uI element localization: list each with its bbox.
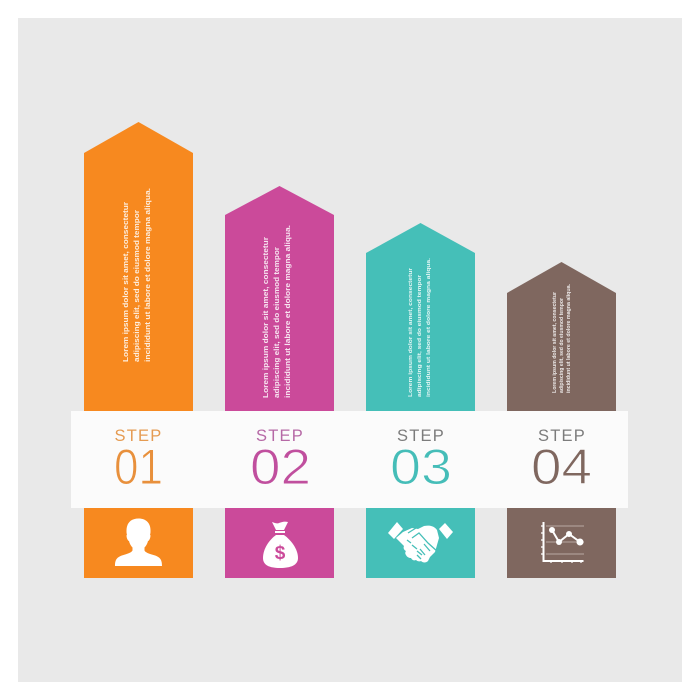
arrow bar: step 3 teal	[366, 223, 475, 578]
text block: step 3 description: incididunt ut labore et dolore magna aliqua.	[426, 258, 432, 397]
label: step 04: 04	[531, 439, 592, 495]
text block: step 1 description: adipiscing elit, sed do eiusmod tempor	[132, 210, 141, 362]
text block: step 3 description: adipiscing elit, sed do eiusmod tempor	[417, 274, 423, 397]
dollar sign: $	[275, 543, 286, 564]
white label band	[71, 411, 628, 508]
label: step 01: 01	[114, 439, 163, 495]
arrow bar: step 4 brown	[507, 262, 616, 578]
label: step 04: STEP	[538, 427, 586, 445]
text block: step 2 description: adipiscing elit, sed do eiusmod tempor	[274, 247, 281, 398]
text block: step 3 description	[408, 258, 432, 397]
icon: handshake	[388, 522, 453, 562]
label: step 02: 02	[250, 439, 311, 495]
text block: step 4 description: adipiscing elit, sed do eiusmod tempor	[559, 298, 565, 393]
text block: step 2 description	[263, 225, 292, 398]
icon: money bag	[263, 522, 298, 568]
text block: step 2 description: incididunt ut labore et dolore magna aliqua.	[285, 225, 292, 398]
text block: step 1 description	[121, 188, 152, 362]
label: step 03: 03	[390, 439, 452, 495]
icon: line chart	[541, 522, 584, 563]
arrow bar: step 1 orange	[84, 122, 193, 578]
text block: step 4 description: incididunt ut labore et dolore magna aliqua.	[566, 283, 572, 393]
text block: step 4 description	[552, 283, 572, 393]
label: step 01: STEP	[115, 427, 162, 445]
label: step 02: STEP	[256, 427, 304, 445]
text block: step 4 description: Lorem ipsum dolor sit amet, consectetur	[552, 292, 558, 393]
arrow bar: step 2 pink	[225, 186, 334, 578]
text block: step 1 description: incididunt ut labore et dolore magna aliqua.	[143, 188, 152, 362]
icon: person	[115, 518, 162, 566]
text block: step 1 description: Lorem ipsum dolor sit amet, consectetur	[121, 202, 130, 362]
text block: step 3 description: Lorem ipsum dolor sit amet, consectetur	[408, 267, 414, 397]
label: step 03: STEP	[397, 427, 445, 445]
text block: step 2 description: Lorem ipsum dolor sit amet, consectetur	[263, 237, 270, 398]
